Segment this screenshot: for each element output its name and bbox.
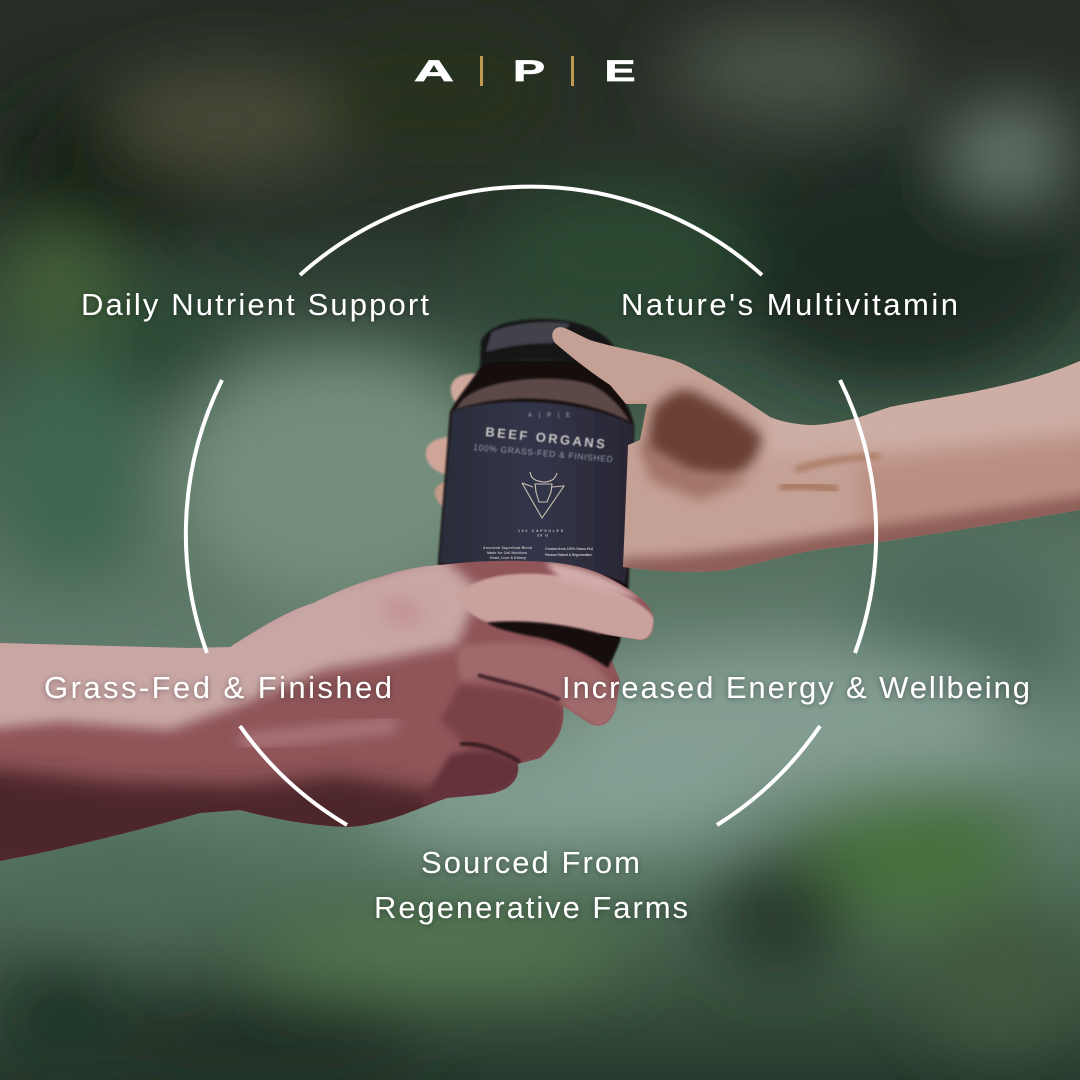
bottle label (439, 402, 634, 584)
product bottle (438, 319, 634, 668)
logo: A P E: P (513, 55, 545, 88)
back fingers of right hand behind bottle (426, 374, 482, 509)
capsule and claims text: Heart, Liver & Kidney (490, 556, 526, 560)
label: Increased Energy & Wellbeing: Increased Energy & Wellbeing (562, 670, 1030, 705)
label: Sourced From Regenerative Farms (374, 845, 688, 925)
thumb base shadow (646, 390, 762, 477)
capsule and claims text: 160 CAPSULES (518, 529, 564, 533)
orange finger glimpse (628, 404, 646, 432)
dark lower forearm (0, 756, 451, 861)
label: Daily Nutrient Support: Daily Nutrient Support (81, 287, 429, 322)
bottle glass (438, 360, 634, 668)
capsule and claims text: 30 G (537, 534, 548, 538)
capsule and claims text: Ancestral Superfood Blend (483, 546, 532, 550)
glass contents highlight (455, 378, 630, 422)
bottle base between fingers (487, 622, 620, 668)
label: Nature's Multivitamin: Nature's Multivitamin (621, 287, 958, 322)
capsule and claims text: Pasture Raised & Regenerative (545, 553, 592, 557)
bottle cap (480, 319, 614, 366)
logo: A P E: A (414, 55, 454, 88)
label text: 100% GRASS-FED & FINISHED (473, 442, 613, 464)
label: Sourced From Regenerative Farms: Sourced From (421, 845, 640, 880)
wrist markings (795, 456, 880, 470)
finger gaps (478, 675, 560, 700)
light upper skin (0, 555, 480, 732)
palm knuckle light patch (384, 598, 420, 626)
label text: BEEF ORGANS (485, 424, 606, 452)
label: Grass-Fed & Finished: Grass-Fed & Finished (44, 670, 392, 705)
logo: A P E: E (604, 55, 636, 88)
circular ring segments (186, 187, 876, 825)
lighter upper skin (760, 361, 1080, 454)
capsule and claims text (483, 529, 593, 560)
lower edge shade (623, 490, 1080, 572)
right hand and forearm (552, 327, 1080, 572)
forearm mid band (859, 436, 1080, 544)
index finger (456, 574, 654, 640)
logo: A P E (414, 55, 636, 88)
label text: A|P|E (528, 413, 570, 419)
capsule and claims text: Made for Cell Nutrition (487, 551, 527, 555)
left hand and forearm (0, 560, 654, 861)
middle and ring fingers (457, 642, 620, 730)
vein highlight (240, 724, 397, 742)
capsule and claims text: Created from 100% Grass-Fed (545, 547, 593, 551)
label: Sourced From Regenerative Farms: Regenerative Farms (374, 890, 688, 925)
icon: bull emblem (522, 472, 564, 518)
palm crease shadow (640, 440, 750, 500)
label text (473, 413, 613, 464)
